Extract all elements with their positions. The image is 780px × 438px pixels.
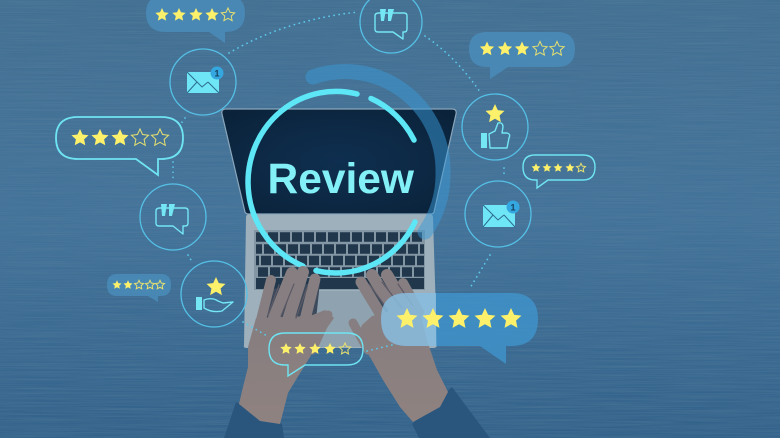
laptop base [244,214,437,348]
title: Review [268,156,415,203]
laptop [222,109,456,348]
icon: mail with badge, right: 1 [510,202,516,212]
review ring graphic [248,72,443,273]
speech bubble: three stars, left [56,117,183,175]
speech bubble: five stars, large [381,293,538,364]
icon: quote bubble, top [360,0,422,53]
icon: quote bubble, left [140,184,206,250]
left hand [239,272,334,424]
icon: star on open hand [181,261,247,327]
speech bubble: three stars, top right [469,32,575,79]
trackpad [306,291,378,347]
icon: mail with badge, upper left: 1 [214,68,220,78]
right hand [353,275,448,422]
laptop screen [222,109,456,214]
speech bubble: four stars, right [523,155,595,188]
speech bubble: four stars, bottom [269,333,363,376]
dotted connectors [173,12,504,351]
finger shadows [262,282,420,322]
speech bubble: two stars, lower left [107,274,171,302]
sleeves [224,387,490,438]
icon: mail with badge, right [465,181,531,247]
speech bubble: four stars, top left [146,0,245,43]
icon: mail with badge, upper left [170,49,236,115]
keyboard [254,230,425,290]
broad blue arc [313,72,443,232]
icon: star and thumbs up [462,94,528,160]
cyan ring segments [248,91,415,273]
